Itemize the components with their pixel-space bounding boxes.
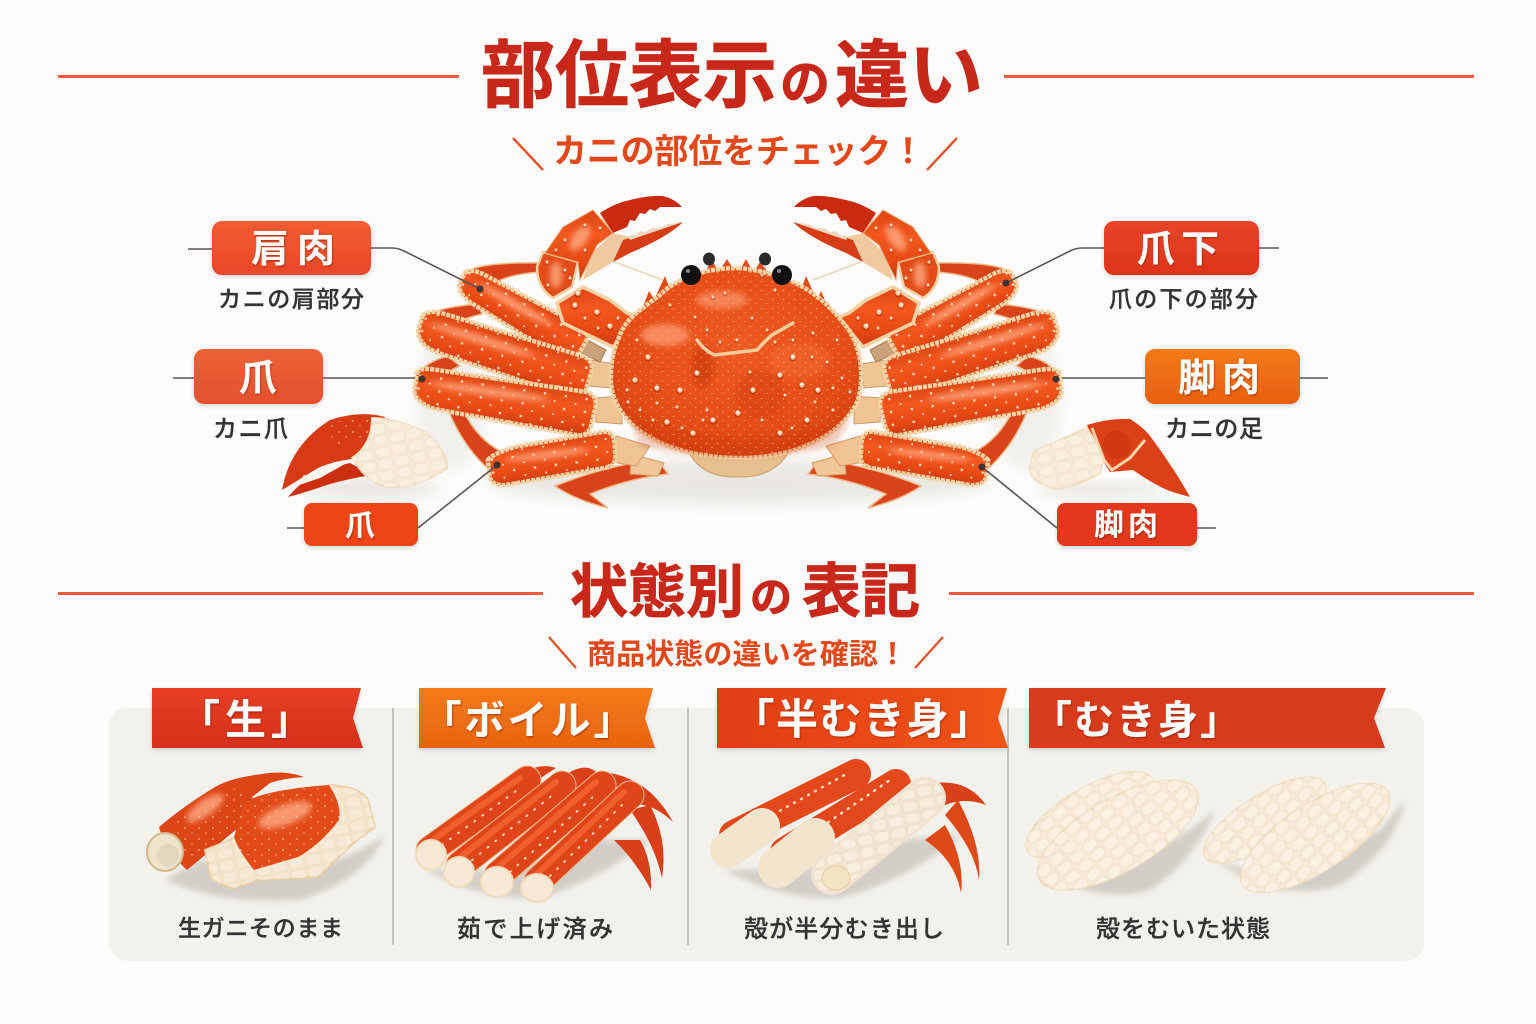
eyes [681,252,792,285]
panel: product states [109,688,1424,961]
caption: 殻をむいた状態: 殻をむいた状態 [1096,916,1270,943]
image: peeled meat [1014,756,1405,913]
image: shelled claw right [1030,419,1190,497]
carapace [611,268,861,458]
heading: 状態別の表記: の [750,574,792,621]
apron [688,450,790,477]
heading: 状態別の表記: 状態別 [570,560,744,625]
label: 脚肉 [1052,349,1328,443]
crab illustration [411,196,1065,508]
label: 脚肉: カニの足 [1165,416,1263,443]
label: 肩肉: 肩肉 [251,229,343,271]
ribbon: むき身: 「むき身」 [1032,699,1242,743]
title: 部位表示の違い: の [780,56,830,112]
shell spikes [638,259,836,322]
ribbon: ボイル [419,688,655,748]
arm [557,287,638,347]
label: 爪 [173,349,426,443]
subtitle: 商品状態の違いを確認: 商品状態の違いを確認！ [587,638,907,671]
heading: 状態別の表記 [58,559,1474,625]
leg 4 [486,431,618,487]
claw [537,196,683,298]
image: boiled legs [416,766,673,902]
label: 爪 small [287,462,500,546]
ribbon: 生 [152,688,363,748]
title: 部位表示の違い [58,34,1474,117]
label: 肩肉 [188,221,484,312]
subtitle: カニの部位をチェック: カニの部位をチェック！ [553,133,925,171]
ribbon: むき身 [1029,688,1386,748]
caption: 殻が半分むき出し: 殻が半分むき出し [744,916,944,943]
label: 爪下 [1002,221,1279,312]
heading: 状態別の表記: 表記 [802,559,920,625]
caption: 茹で上げ済み: 茹で上げ済み [457,916,613,943]
label: 爪: カニ爪 [213,416,288,443]
title: 部位表示の違い: 違い [835,34,983,117]
label: 爪 small: 爪 [345,510,375,543]
label: 脚肉 small [978,464,1216,546]
label: 爪下: 爪下 [1137,229,1225,271]
image: raw claws [147,773,385,901]
label: 脚肉 small: 脚肉 [1094,509,1162,542]
image: half-peeled legs [725,772,986,898]
leg 2 [412,308,595,401]
ribbon: 半むき身: 「半むき身」 [732,696,994,743]
label: 肩肉: カニの肩部分 [218,286,364,312]
ribbon: ボイル: 「ボイル」 [422,699,636,743]
title: 部位表示の違い: 部位表示 [481,34,777,117]
label: 爪下: 爪の下の部分 [1109,286,1258,312]
label: 爪: 爪 [239,358,277,400]
image: shelled claw left [282,414,447,497]
label: 脚肉: 脚肉 [1178,358,1266,400]
caption: 生ガニそのまま: 生ガニそのまま [178,915,343,941]
leg 3 [411,367,598,437]
leg 1 [451,263,592,365]
ribbon: 生: 「生」 [179,697,317,743]
